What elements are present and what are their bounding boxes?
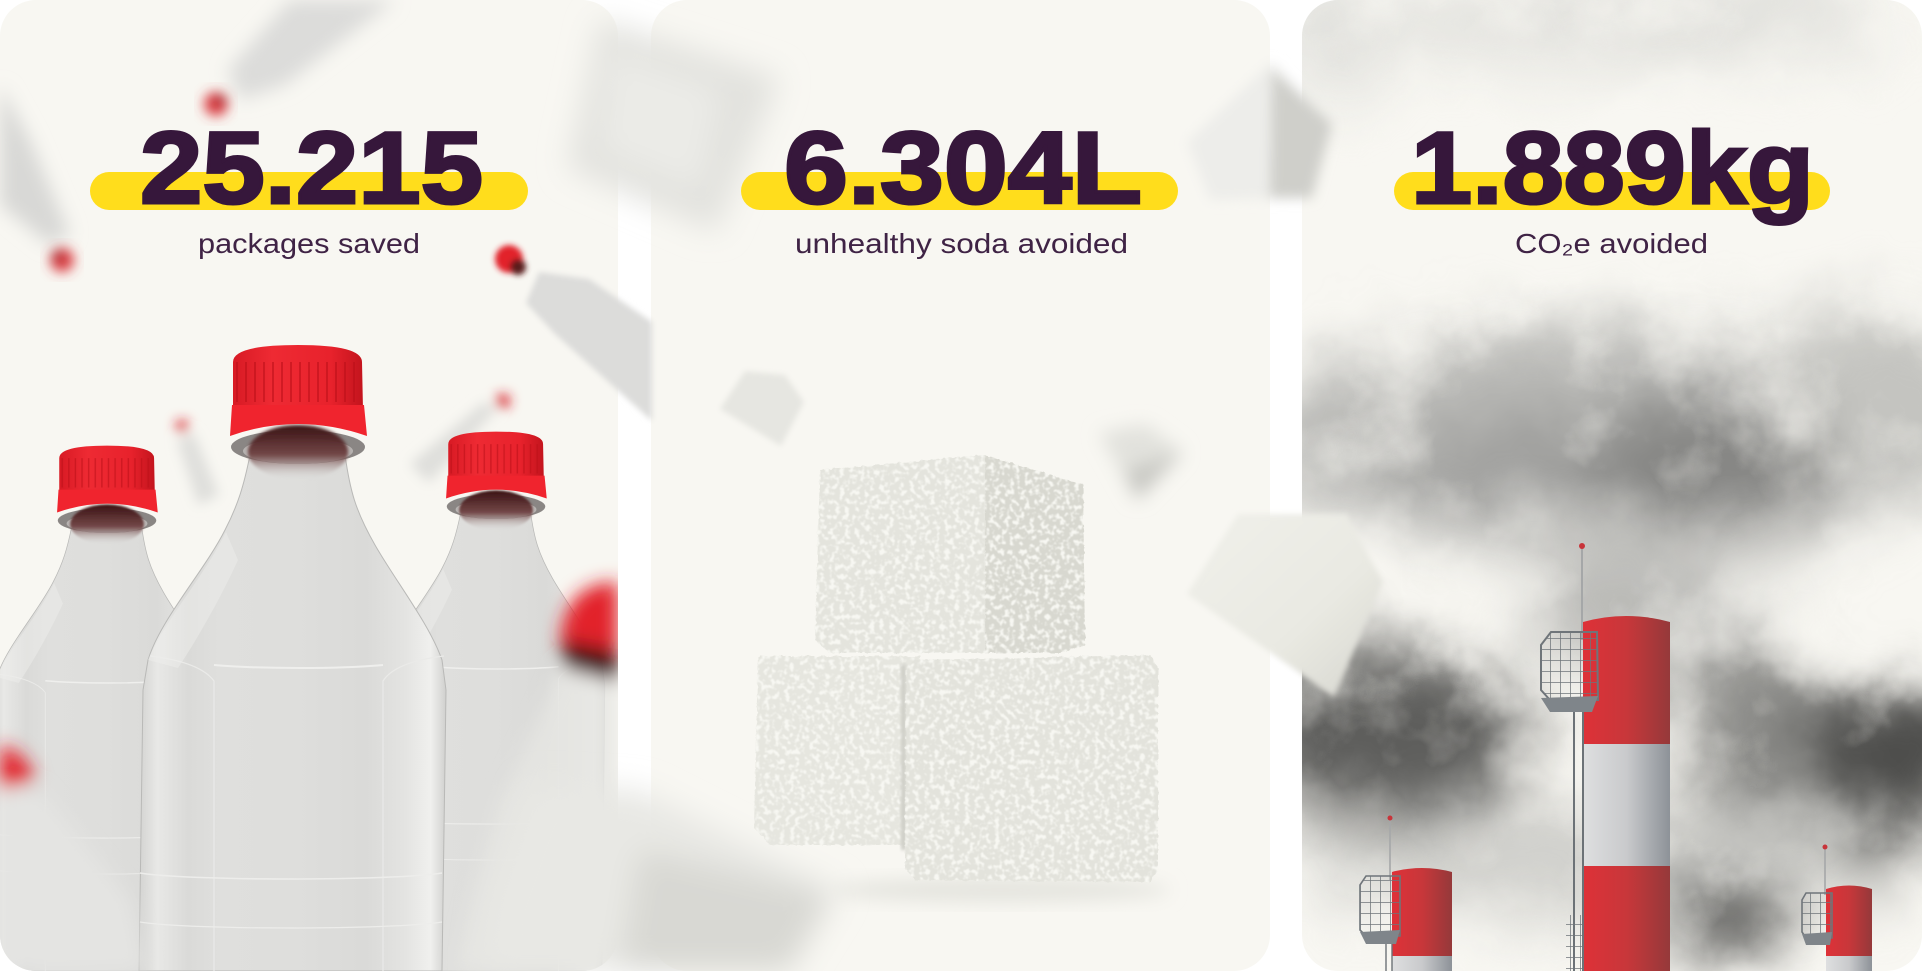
bottle right xyxy=(416,432,605,971)
caged platform xyxy=(1541,632,1598,712)
highlight bar xyxy=(90,172,528,210)
highlight bar xyxy=(741,172,1178,210)
panel: bottles xyxy=(0,0,618,971)
small blurred cube xyxy=(1099,424,1183,501)
label: unhealthy soda avoided xyxy=(795,228,1128,259)
blurred bottle left xyxy=(0,85,70,245)
sugar cube top xyxy=(815,455,1085,653)
panel: sugar cubes xyxy=(651,0,1270,971)
blurred bottle right of panel 1 xyxy=(495,245,652,421)
label: CO₂e avoided xyxy=(1515,228,1708,259)
blurred cap top xyxy=(204,92,228,116)
bottle left xyxy=(0,446,174,971)
small cube xyxy=(720,371,804,446)
floating blurred objects across gaps xyxy=(480,20,1383,971)
small blurred bottle xyxy=(176,420,219,505)
chimney left xyxy=(1360,816,1452,971)
smoke clouds xyxy=(1235,0,1922,965)
blurred bottle top xyxy=(228,0,395,100)
bottle center xyxy=(139,345,446,971)
blurred cube bottom xyxy=(480,785,840,971)
number: 25.215 xyxy=(140,111,483,225)
label: packages saved xyxy=(198,228,420,259)
sugar cube bottom left xyxy=(754,656,920,845)
cube contact shadow xyxy=(901,664,906,850)
stat: 1.889kg CO2e avoided xyxy=(1394,111,1830,259)
number: 1.889kg xyxy=(1411,111,1814,225)
blurred cube top right xyxy=(1187,62,1332,200)
chimney right xyxy=(1802,844,1872,971)
chimney center xyxy=(1541,543,1670,971)
sugar cube bottom right xyxy=(905,655,1158,882)
blurred cube top left xyxy=(568,20,780,232)
highlight bar xyxy=(1394,172,1830,210)
blurred foreground bottle left xyxy=(0,745,145,971)
panel: smokestacks xyxy=(1235,0,1922,971)
blurred foreground bottle right xyxy=(455,582,618,971)
number: 6.304L xyxy=(784,111,1142,225)
stat: 6.304L soda avoided xyxy=(741,111,1178,259)
small blurred bottle right xyxy=(410,394,510,483)
large cube right xyxy=(1187,514,1383,697)
ladder xyxy=(1574,712,1583,971)
cube shadow xyxy=(830,878,1170,902)
stat: 25.215 packages saved xyxy=(90,111,528,259)
blurred cap left xyxy=(50,248,74,272)
